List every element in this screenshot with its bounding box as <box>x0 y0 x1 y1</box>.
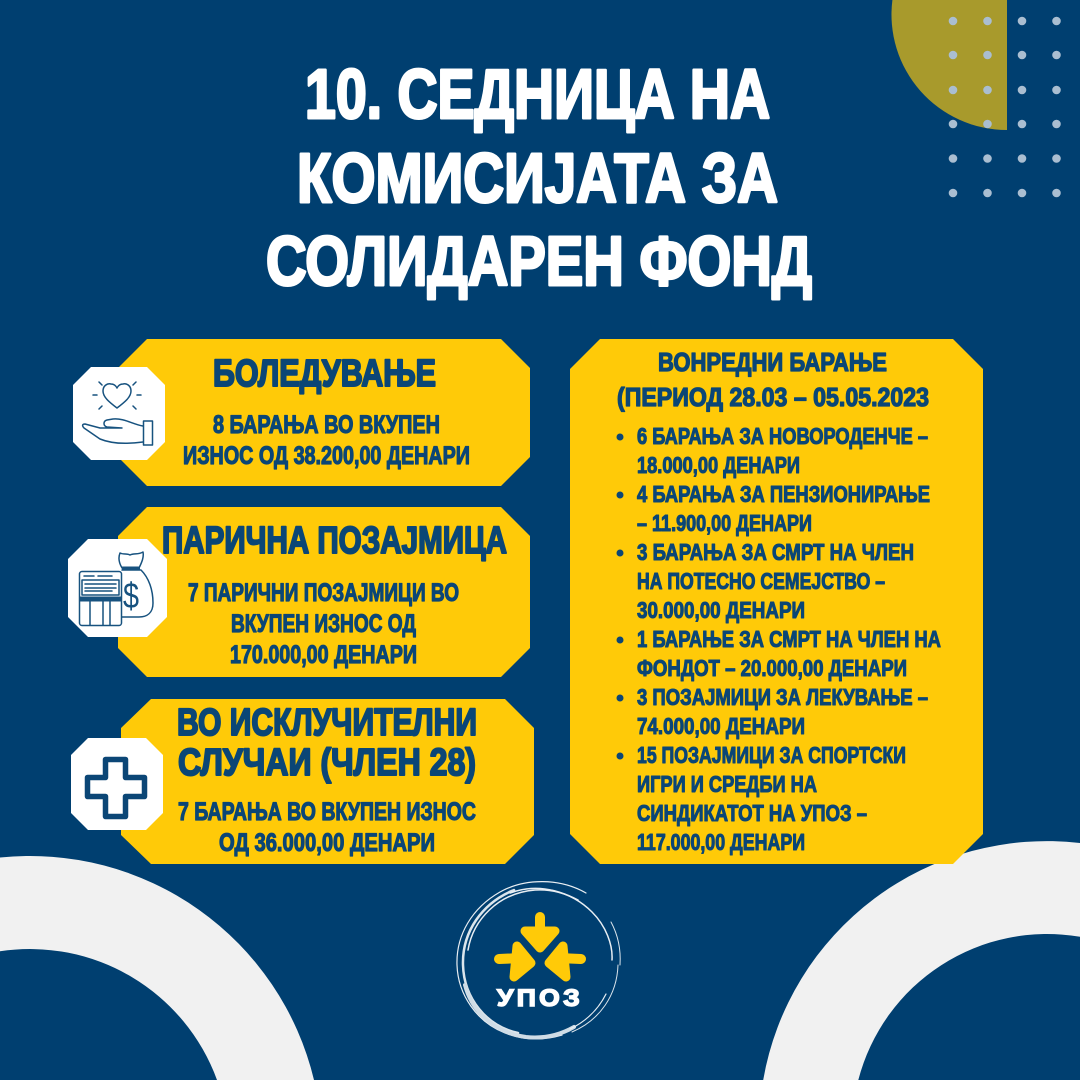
heading: sick leave: БОЛЕДУВАЊЕ <box>213 353 436 395</box>
heading: extraordinary requests: ВОНРЕДНИ БАРАЊЕ <box>658 347 887 377</box>
list: extraordinary requests: НА ПОТЕСНО СЕМЕЈСТВО – <box>637 568 885 594</box>
heading: extraordinary requests: (ПЕРИОД 28.03 – 05.05.2023 <box>617 382 929 412</box>
list: extraordinary requests: 74.000,00 ДЕНАРИ <box>637 713 805 739</box>
decoration: gold semicircle and dot grid <box>891 0 1061 197</box>
logo: УПОЗ <box>457 882 620 1039</box>
decoration: bottom right ring <box>763 841 1080 1080</box>
list: extraordinary requests: 15 ПОЗАЈМИЦИ ЗА СПОРТСКИ <box>637 742 906 768</box>
title <box>266 55 812 300</box>
list: extraordinary requests: 3 ПОЗАЈМИЦИ ЗА ЛЕКУВАЊЕ – <box>637 684 928 710</box>
panel: exceptional cases <box>71 699 534 864</box>
title: 10. СЕДНИЦА НА <box>305 55 770 133</box>
list: extraordinary requests: 117.000,00 ДЕНАРИ <box>637 829 805 855</box>
heading: exceptional cases <box>177 702 477 784</box>
text: cash loan amount: ВКУПЕН ИЗНОС ОД <box>231 610 416 638</box>
text: cash loan amount <box>188 579 459 669</box>
text: cash loan amount: 7 ПАРИЧНИ ПОЗАЈМИЦИ ВО <box>188 579 459 607</box>
icon: medical cross <box>71 738 163 830</box>
panel: cash loan <box>68 507 530 677</box>
list: extraordinary requests: ФОНДОТ – 20.000,00 ДЕНАРИ <box>637 655 907 681</box>
list: extraordinary requests: ИГРИ И СРЕДБИ НА <box>637 771 817 797</box>
list: extraordinary requests <box>616 423 941 855</box>
icon: cash register and money bag: $ <box>123 575 139 616</box>
list: extraordinary requests: 1 БАРАЊЕ ЗА СМРТ НА ЧЛЕН НА <box>637 626 941 652</box>
heading: cash loan: ПАРИЧНА ПОЗАЈМИЦА <box>162 520 507 562</box>
text: sick leave amount <box>183 411 470 470</box>
logo: three converging yellow arrows <box>499 917 581 977</box>
logo: wordmark: УПОЗ <box>497 985 583 1012</box>
text: cash loan amount: 170.000,00 ДЕНАРИ <box>230 641 417 669</box>
title: КОМИСИЈАТА ЗА <box>297 139 778 217</box>
heading: extraordinary requests <box>617 347 929 412</box>
icon: cash register and money bag <box>68 539 167 637</box>
logo: brush circle <box>457 882 620 1039</box>
list: extraordinary requests: СИНДИКАТОТ НА УПОЗ – <box>637 800 867 826</box>
heading: exceptional cases: СЛУЧАИ (ЧЛЕН 28) <box>178 742 476 784</box>
panel: sick leave <box>73 339 530 486</box>
icon: heart over open hand <box>73 367 165 460</box>
list: extraordinary requests: 6 БАРАЊА ЗА НОВОРОДЕНЧЕ – <box>637 423 928 449</box>
list: extraordinary requests: – 11.900,00 ДЕНАРИ <box>637 510 812 536</box>
panel: extraordinary requests <box>570 339 983 864</box>
text: sick leave amount: ИЗНОС ОД 38.200,00 ДЕНАРИ <box>183 442 470 470</box>
list: extraordinary requests: 18.000,00 ДЕНАРИ <box>637 452 800 478</box>
list: extraordinary requests: 3 БАРАЊА ЗА СМРТ НА ЧЛЕН <box>637 539 914 565</box>
heading: exceptional cases: ВО ИСКЛУЧИТЕЛНИ <box>177 702 477 744</box>
text: exceptional cases amount: 7 БАРАЊА ВО ВКУПЕН ИЗНОС <box>178 798 476 826</box>
text: exceptional cases amount: ОД 36.000,00 ДЕНАРИ <box>219 829 435 857</box>
text: exceptional cases amount <box>178 798 476 857</box>
decoration: bottom left ring <box>0 856 314 1080</box>
list: extraordinary requests: 30.000,00 ДЕНАРИ <box>637 597 805 623</box>
list: extraordinary requests: 4 БАРАЊА ЗА ПЕНЗИОНИРАЊЕ <box>637 481 930 507</box>
text: sick leave amount: 8 БАРАЊА ВО ВКУПЕН <box>213 411 440 439</box>
title: СОЛИДАРЕН ФОНД <box>266 222 812 300</box>
